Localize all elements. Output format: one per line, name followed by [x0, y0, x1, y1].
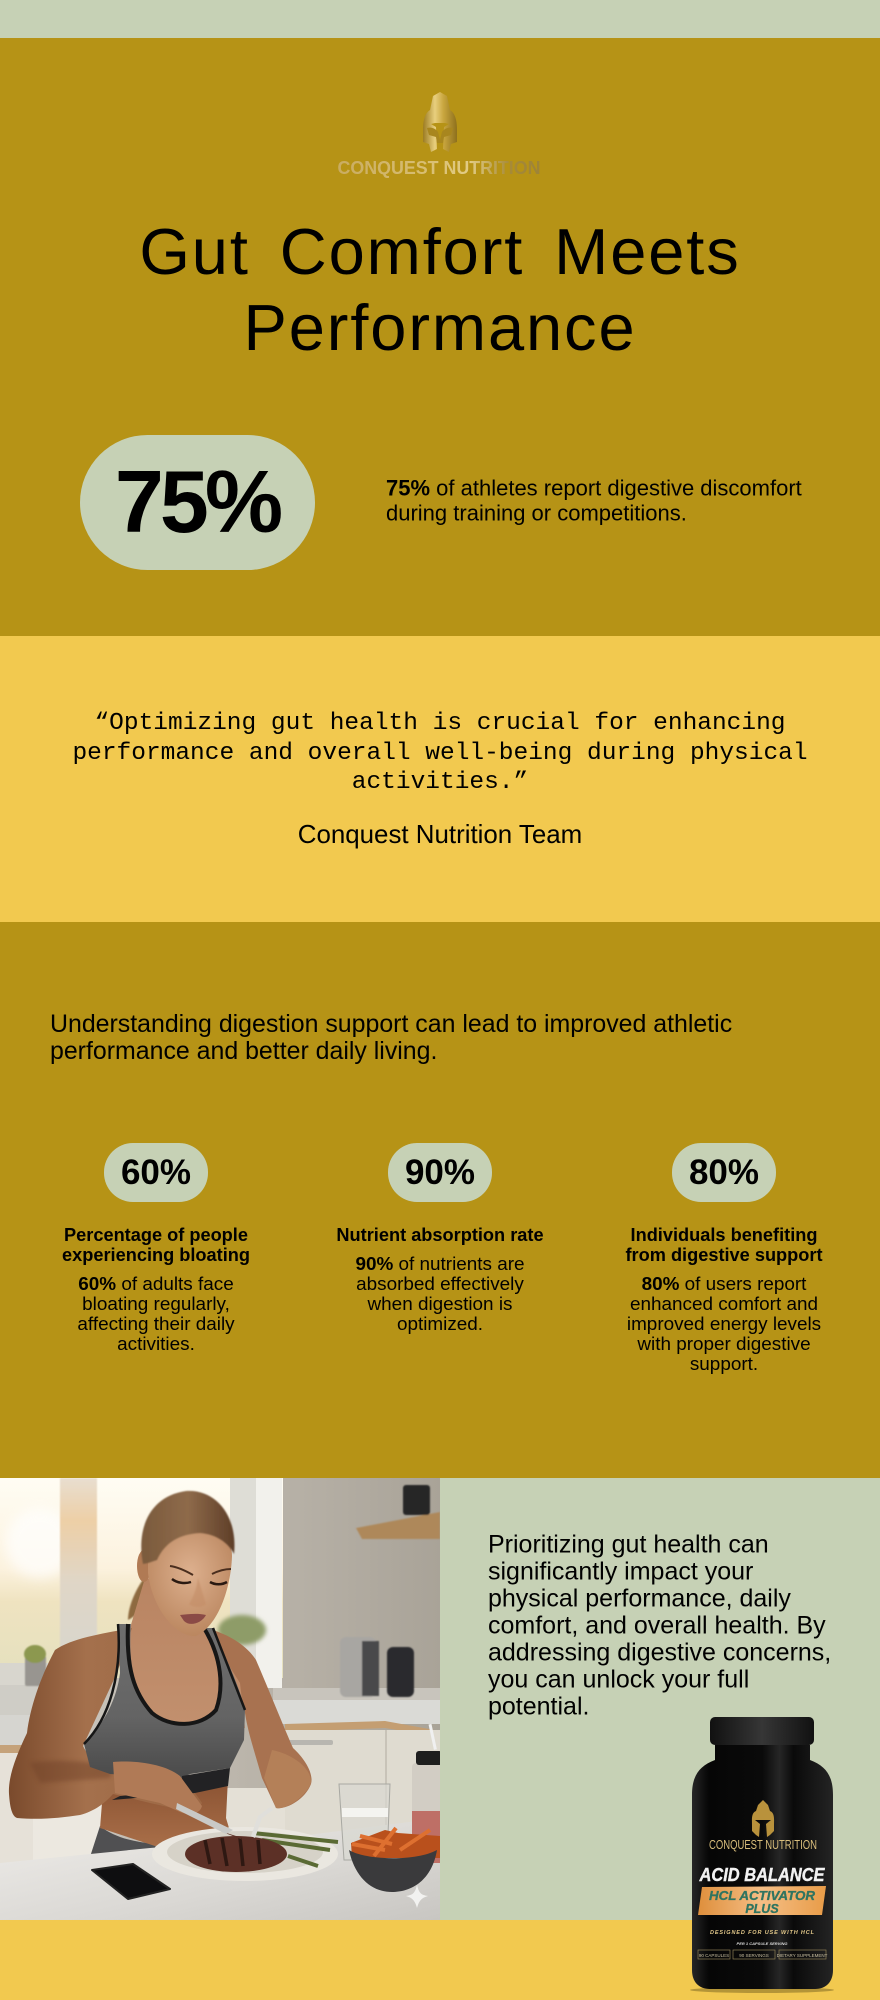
- conclusion text: physical performance, daily: [488, 1584, 791, 1612]
- bowl of sweet potato fries: [349, 1828, 440, 1892]
- intro text: [50, 1010, 732, 1064]
- body: digestive support: with proper digestive: [637, 1334, 811, 1355]
- underband: [112, 1768, 230, 1800]
- heading: bloating: [62, 1225, 250, 1265]
- body: bloating: activities.: [117, 1334, 195, 1355]
- body: bloating: [77, 1274, 235, 1355]
- badge text: [699, 1953, 828, 1958]
- badge text: 90 SERVINGS: [739, 1953, 769, 1958]
- product name: ACID BALANCE: [699, 1865, 825, 1885]
- cap: [710, 1717, 814, 1745]
- stat pill: 75%: [80, 435, 315, 570]
- stat column: 90%: [336, 1143, 544, 1335]
- sparkle watermark: [406, 1885, 428, 1908]
- conclusion text: potential.: [488, 1692, 589, 1720]
- intro text: Understanding digestion support can lead to improved athletic: [50, 1010, 732, 1038]
- body: absorption: [355, 1254, 525, 1335]
- quote author: Conquest Nutrition Team: [298, 821, 582, 849]
- title: Performance: [244, 291, 636, 364]
- number 90%: 90%: [405, 1153, 475, 1192]
- fork hand: [264, 1750, 311, 1808]
- quote text: “Optimizing gut health is crucial for enhancing: [94, 710, 786, 737]
- knife: [176, 1803, 233, 1834]
- brows, eyes and lips: [170, 1566, 231, 1575]
- body: absorption: 90% of nutrients are: [355, 1254, 525, 1275]
- conclusion text: comfort, and overall health. By: [488, 1612, 826, 1640]
- water glass: [339, 1784, 390, 1860]
- panel: digestion support: [0, 922, 880, 1478]
- title: [139, 215, 741, 364]
- brand logo: [338, 92, 540, 178]
- chest and neck: [122, 1578, 245, 1728]
- stat description: [386, 476, 802, 525]
- top sage band: [0, 0, 880, 38]
- ear: [137, 1550, 149, 1582]
- body: bloating: affecting their daily: [77, 1314, 235, 1335]
- orange label: [698, 1886, 826, 1915]
- number 80%: 80%: [689, 1153, 759, 1192]
- product badges: [698, 1950, 826, 1959]
- steak: [185, 1831, 287, 1872]
- pill: 60%: [104, 1143, 208, 1202]
- heading: absorption: Nutrient absorption rate: [336, 1225, 544, 1245]
- viewer-left arm: [9, 1628, 202, 1819]
- photo: athlete eating a healthy meal: [0, 1478, 440, 1920]
- potted plant on sill: [24, 1645, 46, 1686]
- shelf: [356, 1485, 440, 1539]
- face: [148, 1530, 232, 1636]
- panel: hero: [0, 38, 880, 636]
- conclusion text: you can unlock your full: [488, 1666, 749, 1694]
- body: digestive support: improved energy levels: [627, 1314, 821, 1335]
- panel: quote: [0, 636, 880, 922]
- big number 75%: 75%: [115, 452, 279, 551]
- stat description: during training or competitions.: [386, 500, 687, 525]
- kettle and appliance: [340, 1637, 414, 1697]
- body: absorption: absorbed effectively: [356, 1274, 524, 1295]
- background plant: [218, 1615, 266, 1645]
- body: digestive support: support.: [690, 1354, 758, 1375]
- heading: bloating: Percentage of people: [64, 1225, 248, 1245]
- pill: 80%: [672, 1143, 776, 1202]
- bottle body: [692, 1745, 833, 1989]
- title: Gut Comfort Meets: [139, 215, 741, 288]
- badge text: DIETARY SUPPLEMENT: [777, 1953, 828, 1958]
- badge text: 90 CAPSULES: [699, 1953, 729, 1958]
- conclusion text: Prioritizing gut health can: [488, 1530, 769, 1558]
- fork: [251, 1828, 258, 1838]
- body: absorption: when digestion is: [368, 1294, 512, 1315]
- athlete: [9, 1491, 312, 1863]
- conclusion text: significantly impact your: [488, 1558, 753, 1586]
- pill: 90%: [388, 1143, 492, 1202]
- heading: bloating: experiencing bloating: [62, 1245, 250, 1265]
- serving line: PER 1 CAPSULE SERVING: [737, 1941, 787, 1946]
- sports top: [84, 1624, 245, 1778]
- quote text: performance and overall well-being during physical: [72, 739, 808, 766]
- product bottle: Acid Balance: [690, 1717, 834, 1993]
- footer band: [0, 1920, 880, 2000]
- body: digestive support: 80% of users report: [642, 1274, 806, 1295]
- kitchen background: [0, 1478, 440, 1863]
- viewer-right arm: [206, 1628, 312, 1808]
- body: bloating: 60% of adults face: [78, 1274, 234, 1295]
- number 60%: 60%: [121, 1153, 191, 1192]
- plate: [152, 1827, 338, 1881]
- heading: digestive support: [625, 1225, 823, 1265]
- heading: digestive support: from digestive support: [625, 1245, 823, 1265]
- conclusion text: addressing digestive concerns,: [488, 1638, 831, 1666]
- intro text: performance and better daily living.: [50, 1036, 437, 1064]
- helmet emblem: [752, 1800, 774, 1837]
- body: bloating: bloating regularly,: [82, 1294, 230, 1315]
- body: digestive support: enhanced comfort and: [630, 1294, 818, 1315]
- usage line: DESIGNED FOR USE WITH HCL: [710, 1930, 815, 1936]
- bottle shadow: [690, 1987, 834, 1993]
- product bottle: Acid Balance: PLUS: [745, 1902, 779, 1916]
- brand logo: CONQUEST NUTRITION: [338, 157, 540, 178]
- label text: HCL ACTIVATOR: [709, 1889, 815, 1903]
- asparagus: [253, 1833, 338, 1866]
- stat column: 60%: [62, 1143, 250, 1355]
- conclusion text: [488, 1530, 831, 1720]
- quote text: activities.”: [352, 769, 528, 796]
- stat description: 75% of athletes report digestive discomfort: [386, 476, 802, 500]
- stat column: 80%: [625, 1143, 823, 1375]
- drink bottle: [412, 1724, 442, 1863]
- body: absorption: optimized.: [397, 1314, 483, 1335]
- body: digestive support: [627, 1274, 821, 1375]
- panel: conclusion background: [440, 1478, 880, 1920]
- hair: [141, 1491, 234, 1564]
- midriff: [100, 1778, 232, 1846]
- heading: digestive support: Individuals benefiting: [631, 1225, 817, 1245]
- smartphone: [92, 1864, 170, 1899]
- quote text: [72, 710, 808, 796]
- knife hand: [113, 1762, 202, 1814]
- table: [0, 1818, 440, 1920]
- ponytail: [127, 1580, 144, 1620]
- forearm highlight: [30, 1761, 115, 1783]
- leggings: [91, 1826, 156, 1854]
